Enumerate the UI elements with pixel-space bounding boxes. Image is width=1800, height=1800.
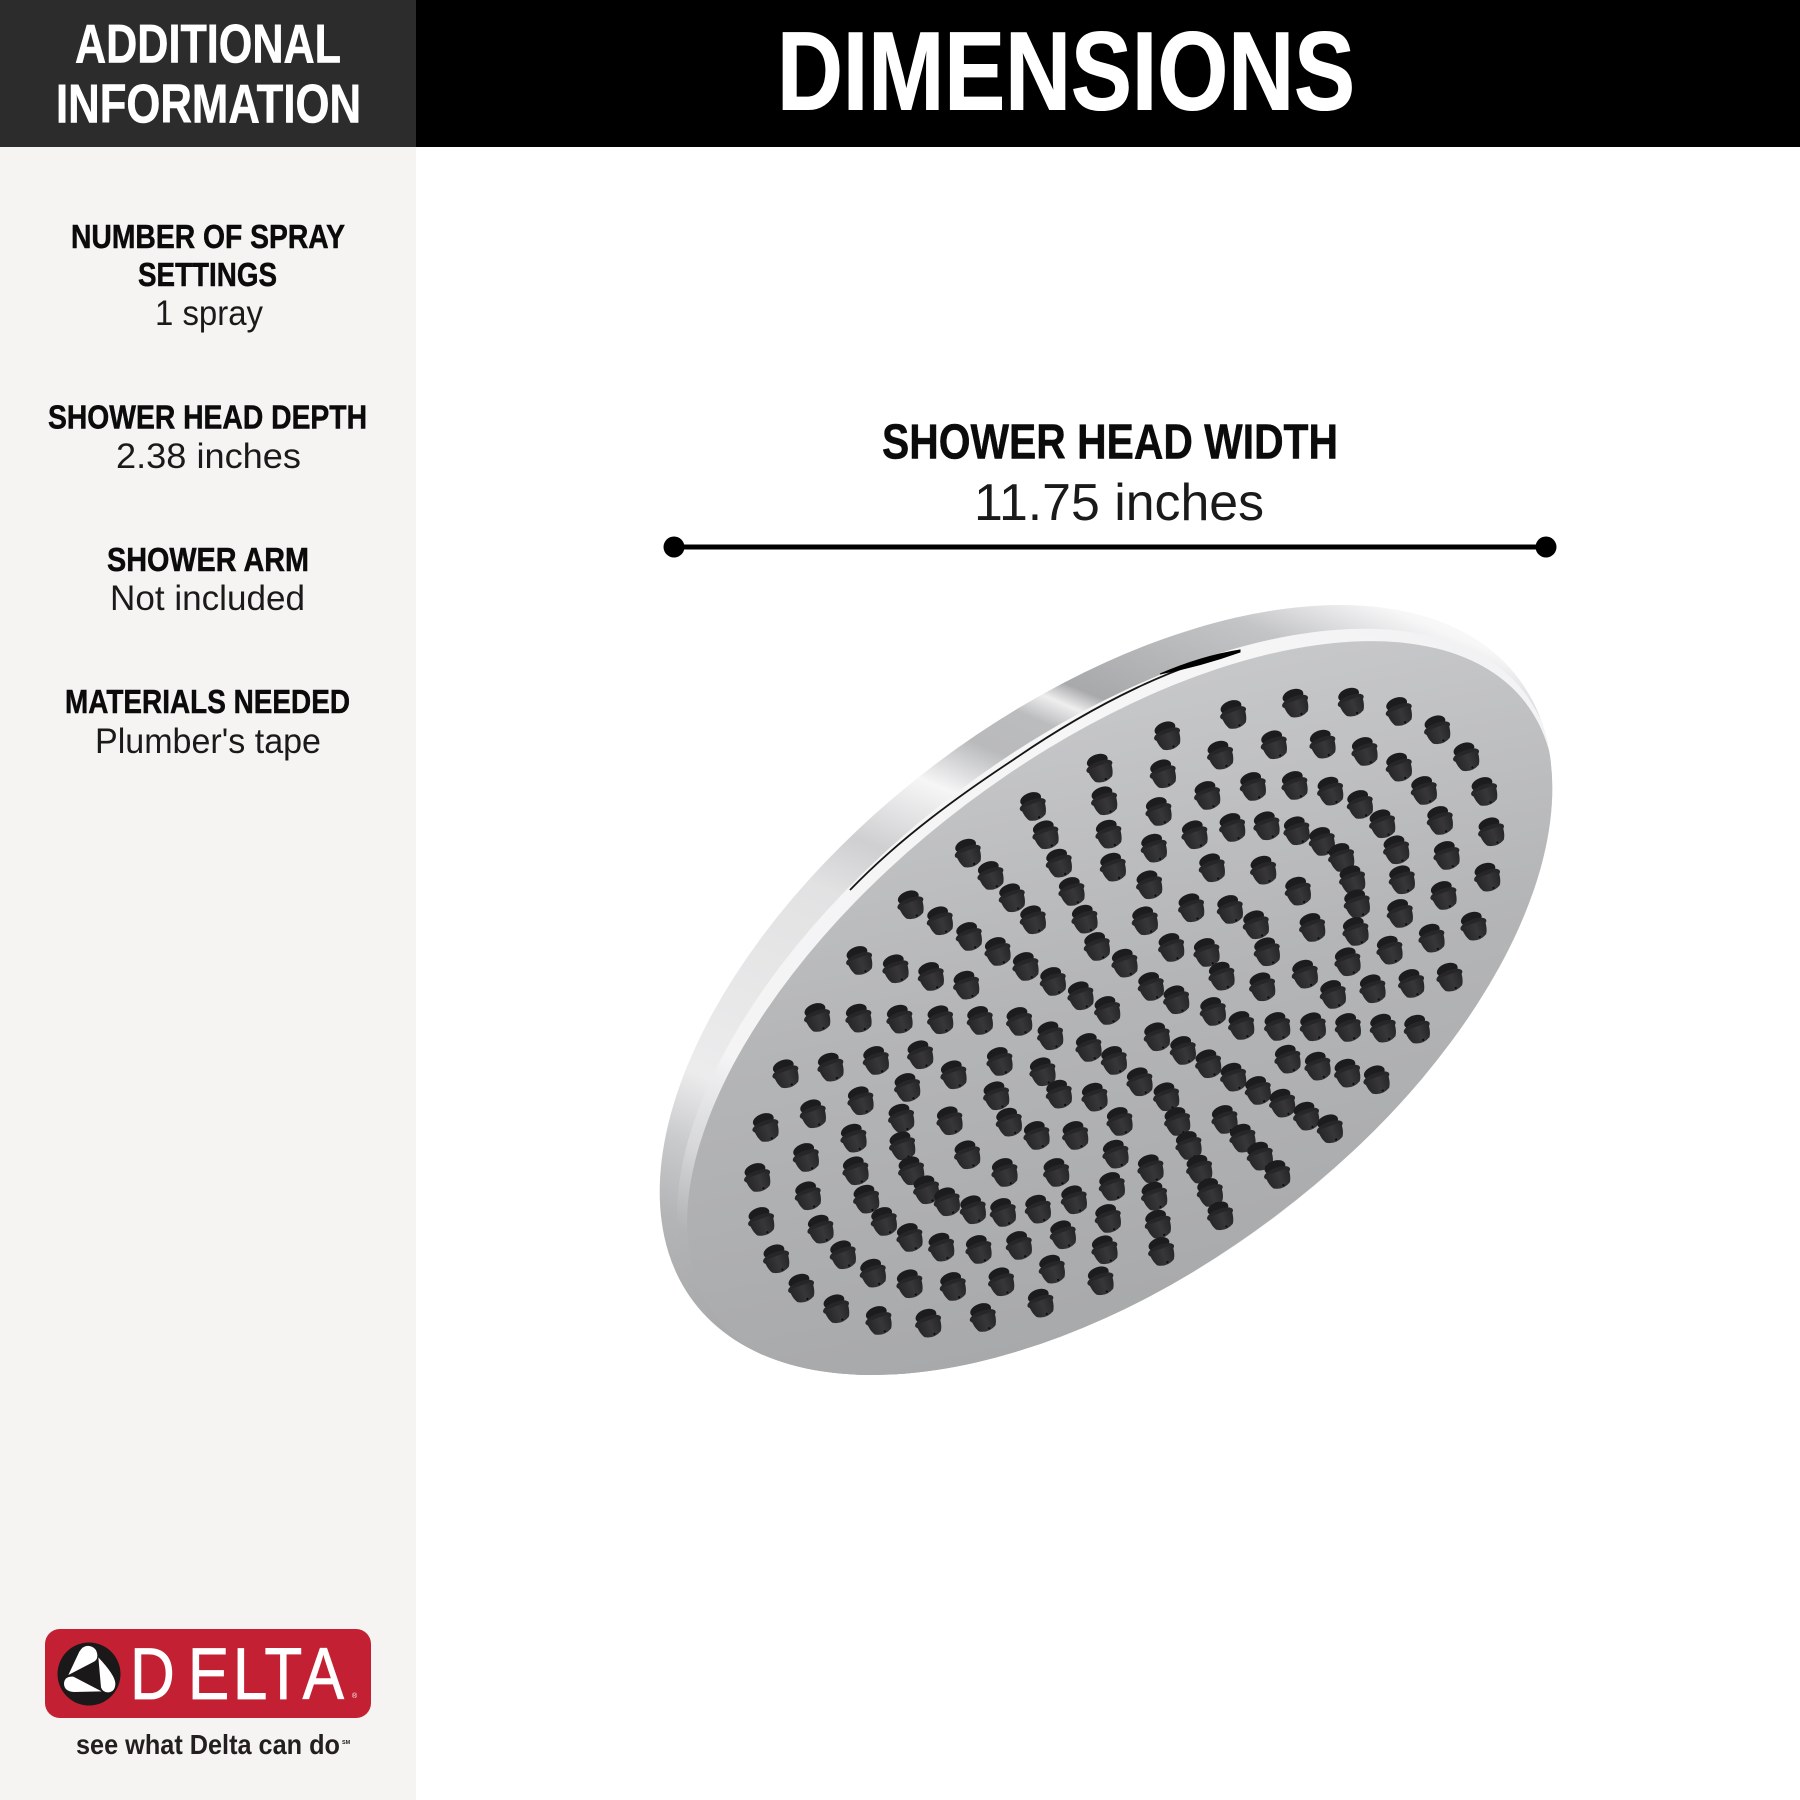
panel: additional information sidebar [0, 0, 416, 1800]
text block: materials needed: MATERIALS NEEDED [65, 684, 350, 721]
panel: additional information header: INFORMATION [56, 72, 361, 134]
text block: shower arm: Not included [110, 579, 305, 618]
text block: number of spray settings [71, 219, 345, 333]
shower head shadow wedge [1160, 650, 1240, 674]
panel: dimensions header [416, 0, 1800, 147]
icon: delta logo: ® [352, 1692, 358, 1700]
nozzles: upper right cluster [1128, 684, 1509, 1013]
icon: delta logo: DELTA [130, 1634, 345, 1715]
nozzles: lower right rays [1122, 968, 1435, 1270]
heading: shower head width: SHOWER HEAD WIDTH [882, 416, 1338, 470]
illustration: shower head [660, 605, 1552, 1375]
text block: shower head depth: SHOWER HEAD DEPTH [48, 400, 367, 436]
icon: delta logo [45, 1629, 371, 1718]
panel: dimensions header: DIMENSIONS [777, 10, 1355, 134]
text block: shower arm [107, 542, 309, 618]
shower head rim [523, 452, 1689, 1528]
text block: shower head depth: 2.38 inches [116, 437, 301, 476]
text block: shower head depth [48, 400, 367, 476]
text block: number of spray settings: SETTINGS [138, 257, 277, 294]
nozzles: spray pattern [740, 684, 1509, 1341]
text block: width value: 11.75 inches [974, 474, 1264, 532]
panel: additional information header [0, 0, 416, 147]
panel: additional information header: ADDITIONAL [75, 12, 341, 74]
text block: materials needed [65, 684, 350, 761]
text block: materials needed: Plumber's tape [95, 722, 321, 761]
text block: tagline: see what Delta can do [76, 1729, 340, 1760]
text block: tagline: SM [342, 1740, 351, 1746]
nozzles: lower left cluster [740, 1056, 1138, 1341]
shower head plates [680, 628, 1552, 1375]
shower head shadow line [850, 651, 1240, 890]
arrow: width dimension line [664, 536, 1556, 558]
nozzles: upper left rays [800, 750, 1143, 1093]
text block: shower arm: SHOWER ARM [107, 542, 309, 579]
text block: number of spray settings: 1 spray [155, 294, 263, 333]
text block: number of spray settings: NUMBER OF SPRAY [71, 219, 345, 256]
